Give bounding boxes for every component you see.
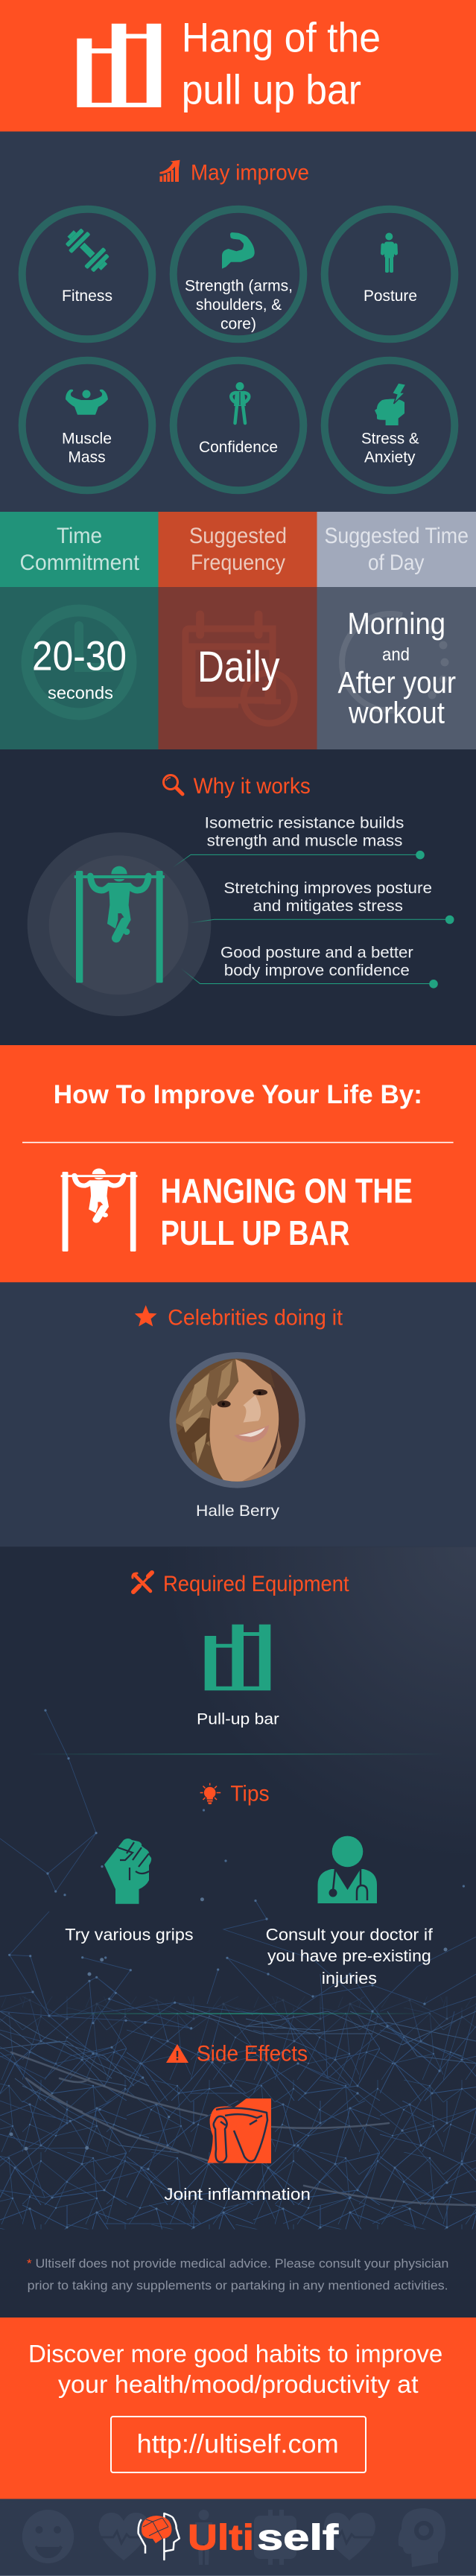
section: tips: [65, 1782, 434, 1987]
heading: celebrities doing it: Celebrities doing it: [168, 1305, 343, 1330]
value: daily: Daily: [197, 643, 280, 691]
stat column: time commitment: [0, 512, 158, 749]
value: 20-30 seconds: seconds: [48, 683, 113, 702]
panel: orange how-to banner: [0, 1045, 476, 1282]
rings: [22, 209, 454, 490]
label: strength: Strength (arms,: [185, 278, 293, 295]
heading: hanging on the pull up bar: HANGING ON THE: [161, 1171, 413, 1210]
callout 2: Stretching improves posture: [223, 880, 432, 897]
panel: footer: [0, 2499, 476, 2576]
icon: light bulb: [200, 1783, 220, 1804]
label: consult your doctor: you have pre-existing: [267, 1947, 431, 1965]
disclaimer: prior to taking any supplements or partaking in any mentioned activities.: [28, 2278, 448, 2292]
portrait ring: [169, 1352, 305, 1488]
heading: why it works: Why it works: [194, 774, 311, 799]
title: pull up bar: [182, 66, 361, 113]
label: try various grips: Try various grips: [65, 1925, 194, 1944]
faint footer icons: [22, 2508, 445, 2567]
icon: white hanging figure: [61, 1168, 137, 1251]
icon: stressed head: [375, 383, 406, 425]
icon: confident person: [231, 382, 249, 423]
value: morning and after your workout: After your: [338, 665, 456, 699]
icon: warning triangle: [166, 2044, 188, 2063]
value: morning and after your workout: and: [382, 645, 410, 665]
icon: background clock: [27, 611, 131, 714]
label: muscle mass: Muscle: [62, 430, 112, 447]
label: muscle mass: Mass: [68, 449, 106, 466]
value: morning and after your workout: Morning: [347, 606, 445, 641]
label: stress and anxiety: Anxiety: [364, 449, 416, 466]
icon: dumbbell: [61, 224, 114, 276]
label: posture: Posture: [364, 288, 417, 305]
logo wordmark: self: [257, 2519, 339, 2558]
icon: teal pull-up bars: [205, 1625, 270, 1690]
callout 1: [173, 815, 425, 867]
callout 2: and mitigates stress: [253, 898, 403, 915]
label: strength: shoulders, &: [196, 296, 282, 314]
icon: shoulder joint: [207, 2098, 271, 2163]
heading: time commitment: Time: [57, 524, 102, 548]
halo circles: [28, 832, 211, 1016]
icon: muscular torso: [66, 390, 108, 415]
icon: growth chart: [159, 160, 180, 182]
background network texture: [0, 1710, 476, 2230]
callout 3: [181, 945, 438, 989]
heading: suggested frequency: Frequency: [191, 551, 285, 575]
label: joint inflammation: Joint inflammation: [164, 2185, 311, 2204]
button: url: [111, 2417, 366, 2472]
label: strength: core): [220, 315, 256, 332]
label: stress and anxiety: Stress &: [361, 430, 419, 447]
heading: suggested frequency: Suggested: [189, 524, 287, 548]
value: morning and after your workout: workout: [348, 696, 445, 730]
heading: time commitment: Commitment: [19, 551, 140, 575]
stat column: suggested time of day: [317, 512, 476, 749]
callout 3: body improve confidence: [224, 962, 410, 979]
callout 2: [190, 880, 454, 924]
panel: may improve: [0, 131, 476, 512]
label: pull-up bar: Pull-up bar: [197, 1711, 279, 1728]
label: consult your doctor: Consult your doctor if: [266, 1925, 434, 1944]
heading: tips: Tips: [230, 1782, 270, 1806]
panel: dark lower background: [0, 1546, 476, 2318]
callout 1: Isometric resistance builds: [205, 815, 404, 832]
icon: flexed arm: [222, 232, 255, 269]
call to action text: Discover more good habits to improve: [28, 2340, 442, 2367]
button: url: http://ultiself.com: [137, 2430, 339, 2458]
icon: background calendar: [185, 615, 294, 723]
heading: may improve: May improve: [191, 161, 309, 185]
panel: call to action: [0, 2318, 476, 2499]
value: 20-30 seconds: 20-30: [32, 632, 127, 679]
label: consult your doctor: injuries: [322, 1969, 377, 1987]
heading: side effects: Side Effects: [197, 2041, 308, 2066]
icon: background clock dots: [342, 614, 445, 711]
heading: suggested time of day: of Day: [368, 551, 425, 575]
panel: why it works: [0, 749, 476, 1045]
heading: how to improve: How To Improve Your Life By:: [54, 1080, 422, 1109]
callout 3: Good posture and a better: [220, 945, 413, 962]
section: side effects: [164, 2041, 311, 2204]
logo: brain head: [139, 2513, 180, 2560]
label: confidence: Confidence: [199, 439, 278, 456]
label: fitness: Fitness: [62, 288, 112, 305]
icon: doctor: [317, 1836, 377, 1903]
panel: celebrities: [0, 1282, 476, 1546]
heading: hanging on the pull up bar: PULL UP BAR: [161, 1214, 349, 1252]
disclaimer: Ultiself does not provide medical advice. Please consult your physician: [36, 2256, 448, 2271]
title: Hang of the: [182, 13, 381, 60]
icon: star: [135, 1305, 157, 1326]
header panel: [0, 0, 476, 131]
icon: magnifier: [164, 775, 183, 794]
icon: wrench and screwdriver: [133, 1573, 152, 1592]
disclaimer: *: [27, 2256, 32, 2271]
call to action text: your health/mood/productivity at: [58, 2370, 419, 2398]
logo wordmark: Ulti: [188, 2519, 254, 2558]
icon: figure hanging on bar: [74, 866, 165, 983]
callout 1: strength and muscle mass: [207, 833, 402, 849]
section: required equipment: [133, 1572, 349, 1728]
icon: pull-up bars: [77, 24, 161, 107]
portrait: Halle Berry: [176, 1359, 299, 1482]
heading: required equipment: Required Equipment: [163, 1572, 349, 1596]
label: Halle Berry: Halle Berry: [196, 1503, 280, 1520]
icon: fist: [104, 1839, 151, 1904]
icon: standing person: [383, 232, 396, 273]
stat column: suggested frequency: [158, 512, 317, 749]
